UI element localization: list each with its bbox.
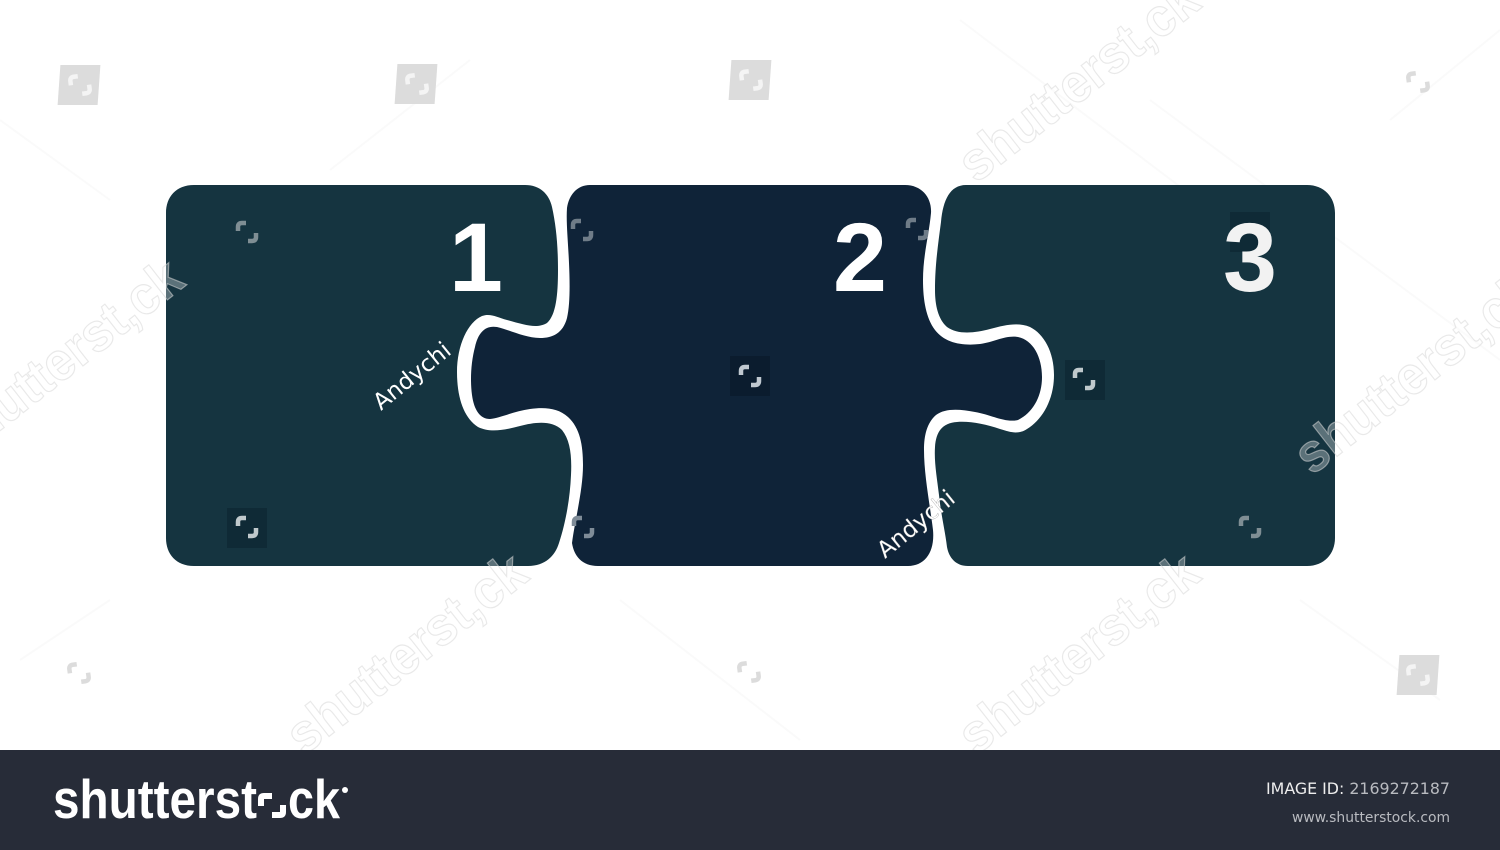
author credit: Andychi right: Andychi bbox=[872, 485, 960, 564]
watermark: icons on pieces bbox=[238, 220, 1259, 536]
watermark: small outline icons on white bbox=[69, 72, 1428, 683]
footer logo: shutterst bbox=[53, 768, 257, 830]
footer image id: IMAGE ID: 2169272187 bbox=[1266, 779, 1450, 798]
watermark: shutterstock wordmarks: shutterst,ck bbox=[274, 540, 539, 765]
footer logo: ck bbox=[288, 768, 340, 830]
puzzle piece 1 bbox=[166, 185, 571, 566]
number 2: 2 bbox=[833, 203, 887, 312]
footer website: www.shutterstock.com bbox=[1292, 810, 1450, 826]
watermark: dark tiles on pieces bbox=[227, 356, 1105, 548]
puzzle piece 2 bbox=[471, 185, 1042, 566]
author credit: Andychi left: Andychi bbox=[368, 337, 456, 416]
number 1: 1 bbox=[449, 203, 503, 312]
puzzle piece 3 bbox=[935, 185, 1335, 566]
dark watermark tile behind number 3 bbox=[1230, 212, 1270, 252]
number 3: 3 bbox=[1223, 203, 1277, 312]
footer bar bbox=[0, 750, 1500, 850]
watermark: light tiles bbox=[58, 60, 1439, 695]
watermark: shutterstock wordmarks: shutterst,ck bbox=[946, 540, 1211, 765]
